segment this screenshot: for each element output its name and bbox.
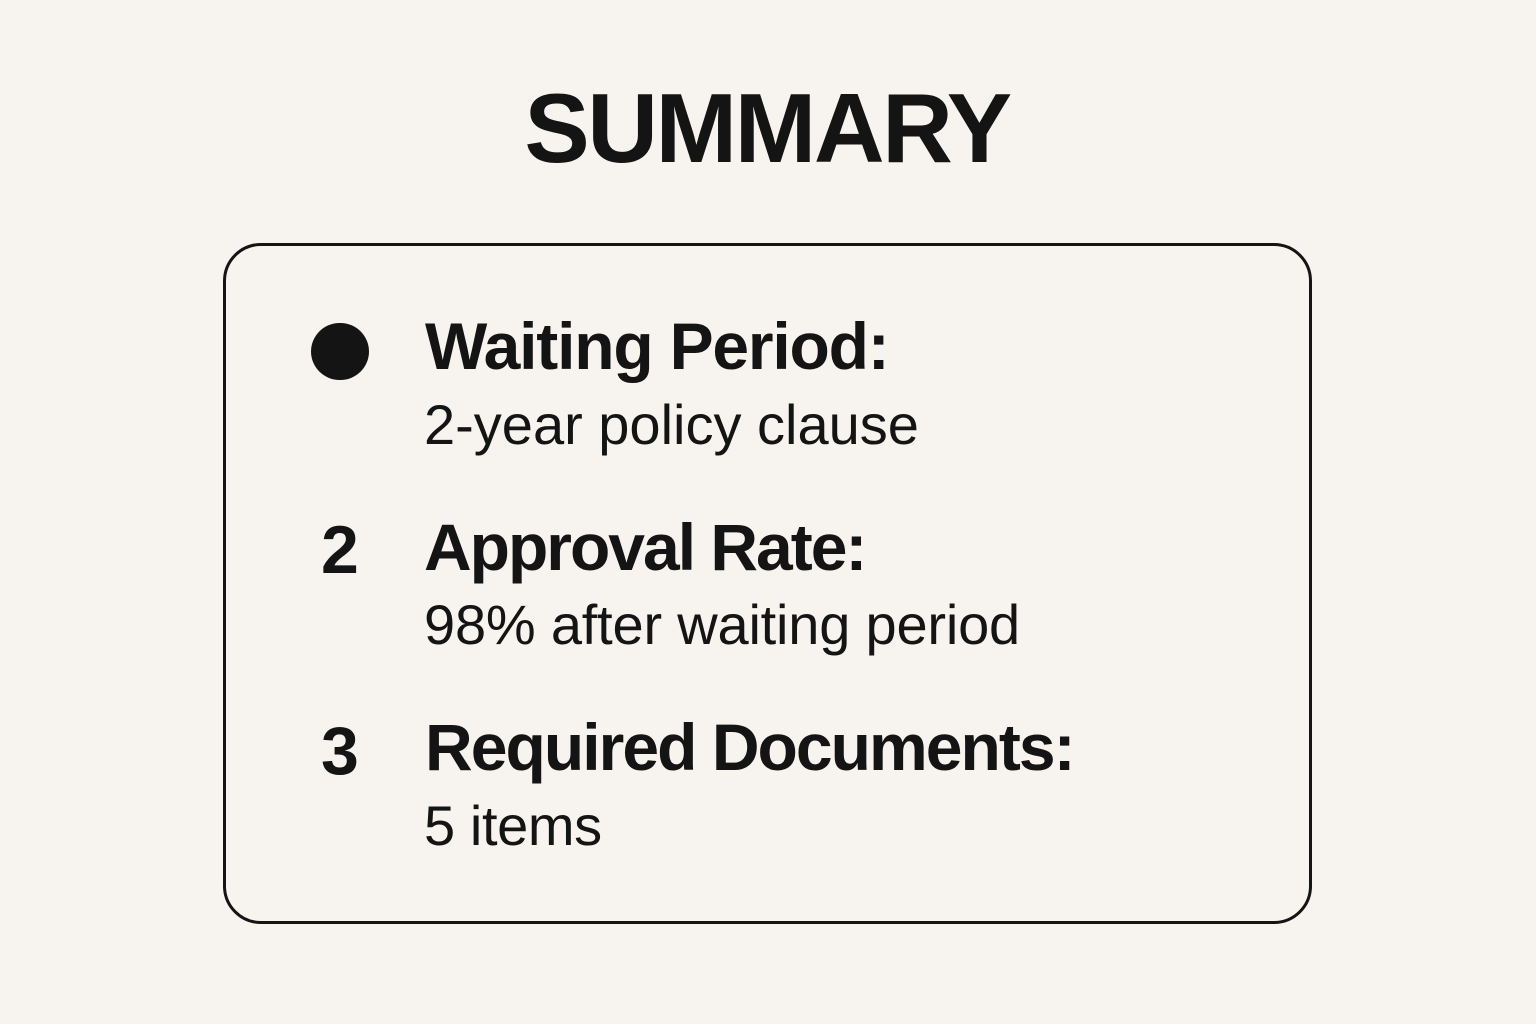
text: required documents detail: 5 items bbox=[424, 794, 602, 857]
icon: bullet dot bbox=[310, 323, 368, 380]
text: waiting period detail: 2-year policy clause bbox=[424, 393, 919, 456]
heading: waiting period: Waiting Period: bbox=[425, 309, 889, 383]
heading: approval rate: Approval Rate: bbox=[424, 510, 865, 584]
title: SUMMARY bbox=[524, 73, 1010, 183]
number 3: 3 bbox=[321, 713, 359, 789]
heading: required documents: Required Documents: bbox=[425, 710, 1074, 784]
panel: summary card bbox=[223, 243, 1312, 924]
number 2: 2 bbox=[321, 512, 359, 588]
text: approval rate detail: 98% after waiting period bbox=[424, 593, 1020, 656]
